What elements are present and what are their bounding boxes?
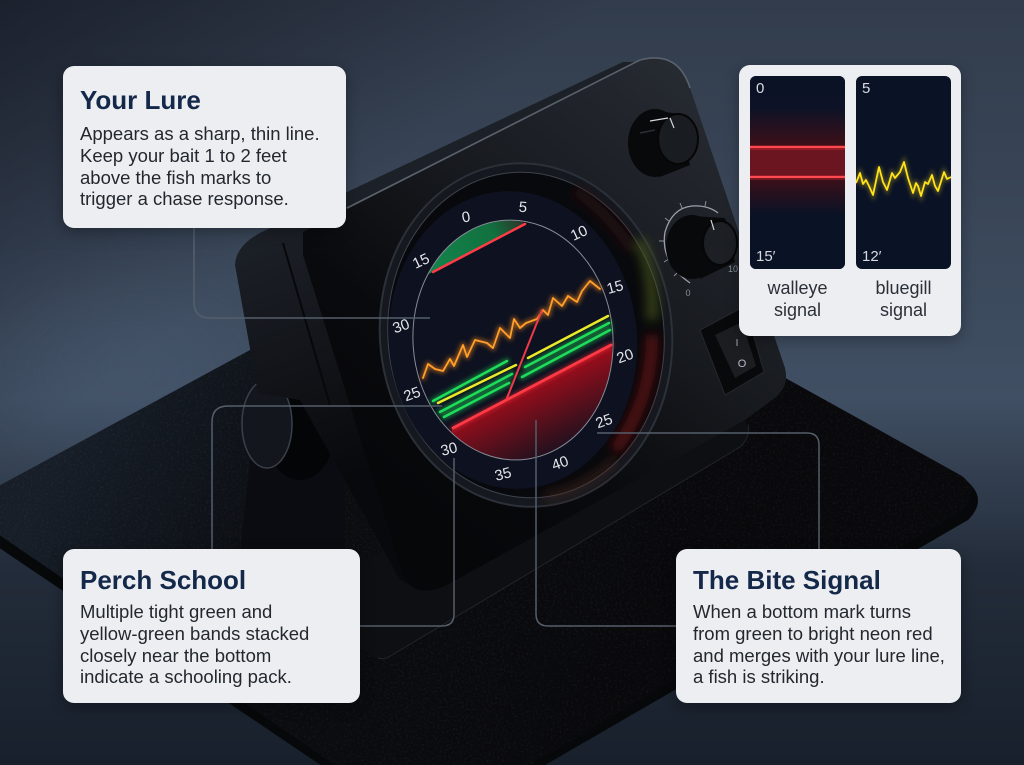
text: bite description: and merges with your lure line, — [693, 645, 945, 666]
depth scale numbers: 15 — [605, 277, 625, 298]
depth scale numbers: 30 — [439, 439, 459, 460]
depth scale numbers: 5 — [518, 199, 528, 216]
depth scale numbers: 35 — [493, 464, 513, 485]
callout: Your Lure — [63, 66, 346, 228]
perch bands glow — [433, 323, 610, 417]
depth scale numbers: 15 — [410, 250, 432, 273]
callout leader lines — [194, 228, 819, 626]
label: walleye signal: walleye — [767, 278, 828, 298]
screen: walleye signal: 15′ — [756, 248, 776, 265]
text: perch description: indicate a schooling pack. — [80, 666, 292, 687]
lower knob with scale — [659, 201, 738, 298]
power switch: O — [738, 358, 747, 370]
text: bite description — [693, 601, 945, 687]
depth scale numbers: 25 — [401, 384, 423, 405]
lower knob with scale: 0 — [685, 288, 691, 298]
text: lure description: Appears as a sharp, thin line. — [80, 123, 320, 144]
heading: Your Lure: Your Lure — [80, 85, 201, 115]
text: lure description — [80, 123, 320, 209]
upper knob — [628, 109, 698, 177]
label: bluegill signal: bluegill — [875, 278, 932, 298]
callout: Perch School — [63, 549, 360, 703]
dial face — [376, 181, 650, 499]
lower knob with scale: 10 — [728, 264, 738, 274]
device body — [235, 58, 786, 591]
text: lure description: trigger a chase response. — [80, 188, 289, 209]
panel: signal comparison — [739, 65, 961, 336]
label: walleye signal — [767, 278, 828, 320]
depth scale numbers: 10 — [568, 222, 590, 245]
callout: The Bite Signal — [676, 549, 961, 703]
dial inner circle fills — [428, 220, 612, 460]
text: perch description: closely near the bottom — [80, 645, 271, 666]
text: lure description: above the fish marks to — [80, 167, 271, 188]
label: bluegill signal: signal — [880, 300, 927, 320]
text: perch description: yellow-green bands stacked — [80, 623, 309, 644]
heading: Perch School: Perch School — [80, 565, 246, 595]
screen: walleye signal — [750, 76, 845, 269]
power switch — [700, 306, 764, 395]
depth scale numbers: 0 — [461, 208, 472, 227]
lure zigzag — [423, 281, 600, 378]
depth scale numbers: 25 — [593, 411, 615, 432]
text: perch description — [80, 601, 309, 687]
depth scale numbers: 40 — [549, 453, 571, 474]
screen: walleye signal: 0 — [756, 80, 764, 97]
screen: bluegill signal: 5 — [862, 80, 870, 97]
depth scale numbers — [390, 199, 636, 485]
screen: bluegill signal: 12′ — [862, 248, 882, 265]
text: lure description: Keep your bait 1 to 2 feet — [80, 145, 287, 166]
text: bite description: When a bottom mark turns — [693, 601, 911, 622]
sonar signal lines — [423, 224, 611, 428]
text: perch description: Multiple tight green and — [80, 601, 272, 622]
heading: The Bite Signal: The Bite Signal — [693, 565, 881, 595]
screen: bluegill signal — [856, 76, 951, 269]
depth scale numbers: 30 — [390, 316, 412, 337]
label: bluegill signal — [875, 278, 932, 320]
text: bite description: from green to bright neon red — [693, 623, 933, 644]
device stand — [240, 374, 345, 552]
rim colour reflections — [545, 190, 652, 497]
sonar dial — [378, 162, 674, 508]
depth scale numbers: 20 — [614, 346, 636, 367]
power switch: I — [736, 338, 738, 349]
device base plate — [300, 420, 748, 659]
leather mat — [0, 350, 978, 765]
label: walleye signal: signal — [774, 300, 821, 320]
text: bite description: a fish is striking. — [693, 666, 825, 687]
